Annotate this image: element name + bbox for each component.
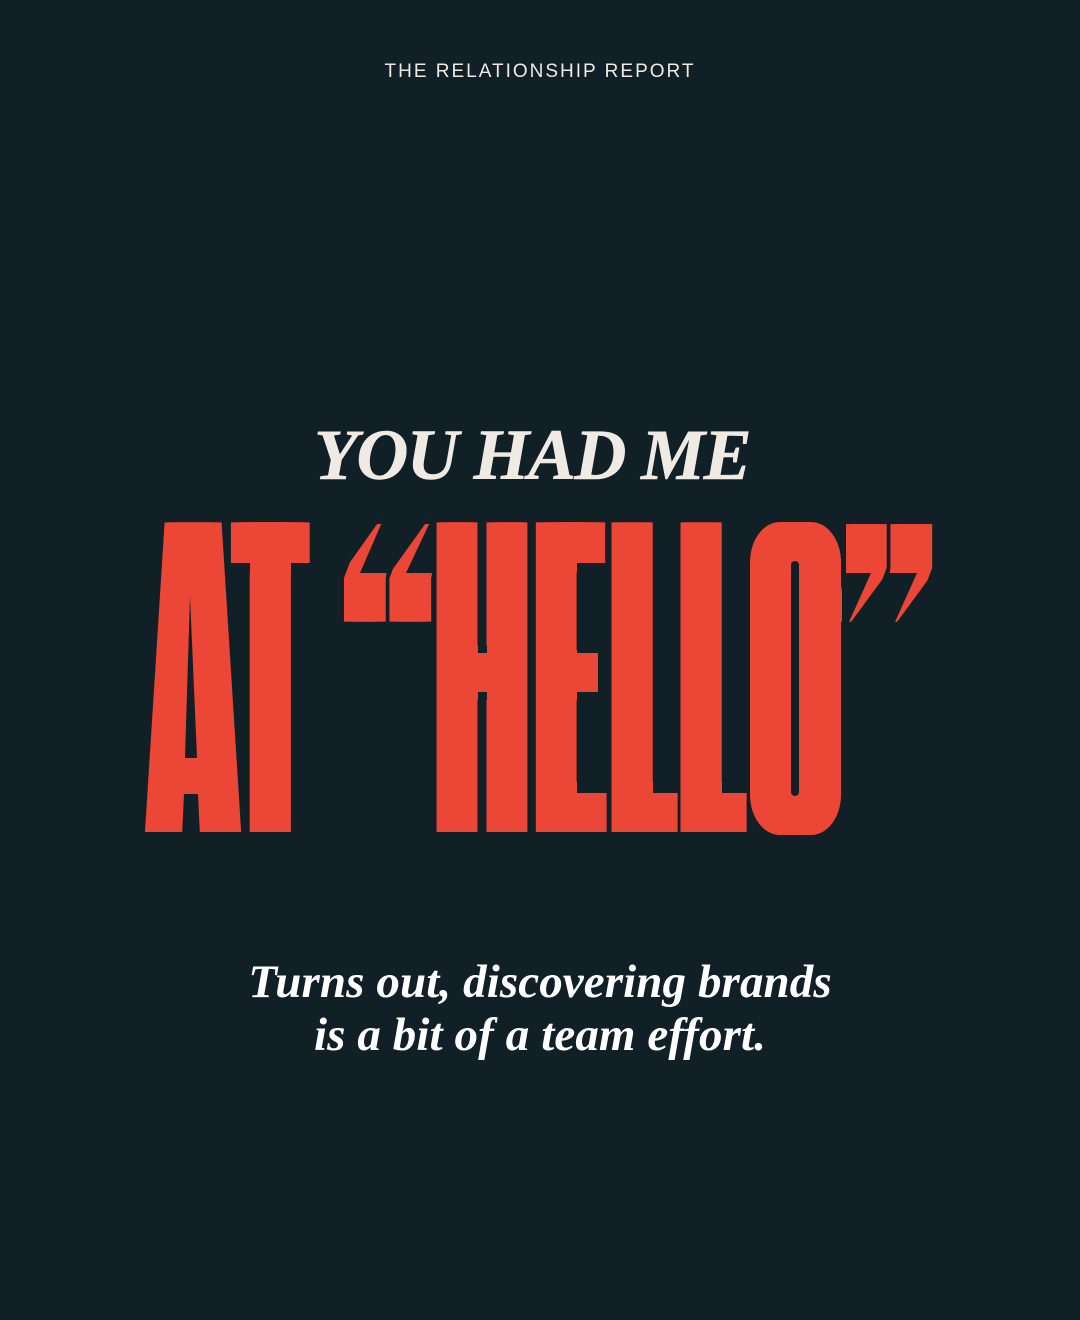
headline: at hello: O (746, 433, 817, 924)
headline: at hello: ” (819, 461, 940, 826)
heading: you had me: YOU HAD ME (314, 415, 750, 495)
subtitle text: is a bit of a team effort. (314, 1008, 766, 1060)
headline: at hello: L (676, 426, 717, 928)
headline: at hello: H (428, 426, 510, 928)
headline: at hello: A (143, 426, 199, 928)
headline: at hello: L (607, 426, 648, 928)
headline: at hello: “ (325, 461, 446, 826)
subtitle text (248, 956, 832, 1060)
headline: at hello: T (230, 426, 282, 928)
subtitle text: Turns out, discovering brands (248, 956, 832, 1008)
headline: at hello (143, 426, 940, 928)
report label: THE RELATIONSHIP REPORT (384, 61, 696, 82)
headline: at hello: E (531, 426, 579, 928)
